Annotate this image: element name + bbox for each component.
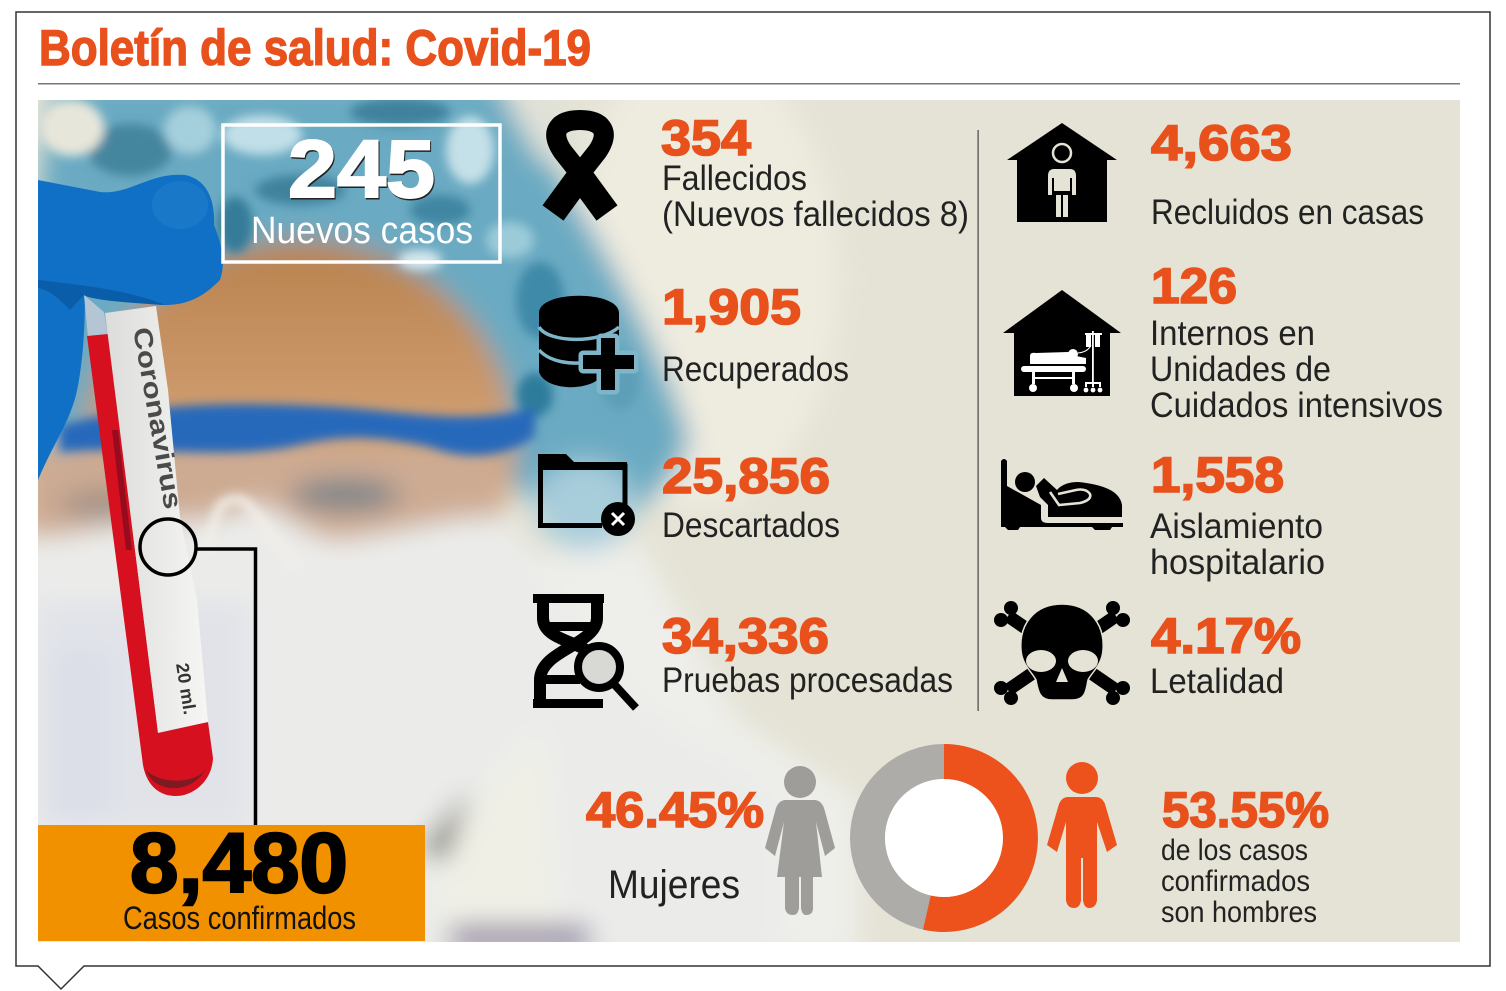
glass top (84, 295, 108, 338)
stat: letalidad (1150, 608, 1301, 701)
stat: cuidados intensivos: 126 (1151, 258, 1237, 314)
title: Boletín de salud: Covid-19 (39, 20, 591, 76)
stat: aislamiento: 1,558 (1151, 447, 1284, 503)
stat: mujeres: Mujeres (608, 863, 740, 907)
stat: recuperados: Recuperados (662, 350, 849, 389)
stat: recluidos (1151, 115, 1424, 232)
stat: recuperados (662, 279, 849, 389)
icon: house with person (1007, 123, 1117, 222)
stat: hombres: son hombres (1161, 896, 1317, 929)
stat: recluidos: Recluidos en casas (1151, 193, 1424, 232)
stat: fallecidos (661, 110, 969, 234)
icon: patient in bed (1001, 459, 1123, 530)
stat: pruebas: Pruebas procesadas (662, 661, 953, 700)
title rule (38, 83, 1460, 84)
callout: new cases: 245 (289, 126, 436, 216)
stat: hombres: de los casos (1161, 834, 1308, 867)
icon: folder (538, 454, 635, 536)
stat: descartados: 25,856 (662, 448, 830, 504)
stat: letalidad: Letalidad (1150, 662, 1284, 701)
icon: database plus (539, 296, 634, 390)
stat: letalidad: 4.17% (1151, 608, 1301, 664)
callout: confirmed cases (38, 816, 425, 941)
stat: aislamiento: Aislamiento (1150, 507, 1323, 546)
stat: mujeres: 46.45% (586, 782, 764, 838)
stat: hombres: 53.55% (1162, 782, 1329, 838)
icon: house with ICU bed (1003, 290, 1121, 396)
stat: descartados: Descartados (662, 506, 840, 545)
icon: man (1047, 762, 1117, 908)
stat: cuidados intensivos (1150, 258, 1443, 425)
label (105, 306, 208, 732)
stat: pruebas: 34,336 (662, 608, 829, 664)
stat: cuidados intensivos: Cuidados intensivos (1150, 386, 1443, 425)
callout: confirmed cases: 8,480 (130, 816, 348, 910)
callout: new cases: 245 (288, 124, 435, 215)
label text: Coronavirus (127, 325, 189, 511)
icon: dna with magnifier (533, 594, 636, 708)
stat: hombres (1161, 782, 1329, 929)
stat: recuperados: 1,905 (662, 279, 801, 335)
stat: mujeres (586, 782, 764, 907)
blood (87, 334, 213, 796)
callout: confirmed cases: Casos confirmados (123, 900, 356, 936)
volume text: 20 ml. (172, 661, 200, 716)
column divider (978, 130, 979, 711)
callout: new cases: Nuevos casos (251, 210, 473, 252)
icon: skull and crossbones (994, 601, 1130, 705)
stat: aislamiento (1150, 447, 1325, 582)
icon: ribbon (553, 120, 607, 214)
stat: aislamiento: hospitalario (1150, 543, 1325, 582)
callout ring and connector (140, 519, 256, 826)
stat: hombres: confirmados (1161, 865, 1310, 898)
stat: pruebas (662, 608, 953, 700)
stat: descartados (662, 448, 840, 545)
icon: blue glove (38, 175, 223, 480)
stat: fallecidos: (Nuevos fallecidos 8) (662, 195, 969, 234)
icon: woman (765, 766, 835, 915)
stat: fallecidos: 354 (661, 110, 751, 166)
callout: new cases (223, 124, 500, 262)
stat: recluidos: 4,663 (1151, 115, 1292, 171)
donut chart (868, 762, 1020, 914)
stat: cuidados intensivos: Unidades de (1150, 350, 1331, 389)
test tube (84, 295, 213, 796)
stat: cuidados intensivos: Internos en (1150, 314, 1315, 353)
stat: fallecidos: Fallecidos (662, 159, 807, 198)
